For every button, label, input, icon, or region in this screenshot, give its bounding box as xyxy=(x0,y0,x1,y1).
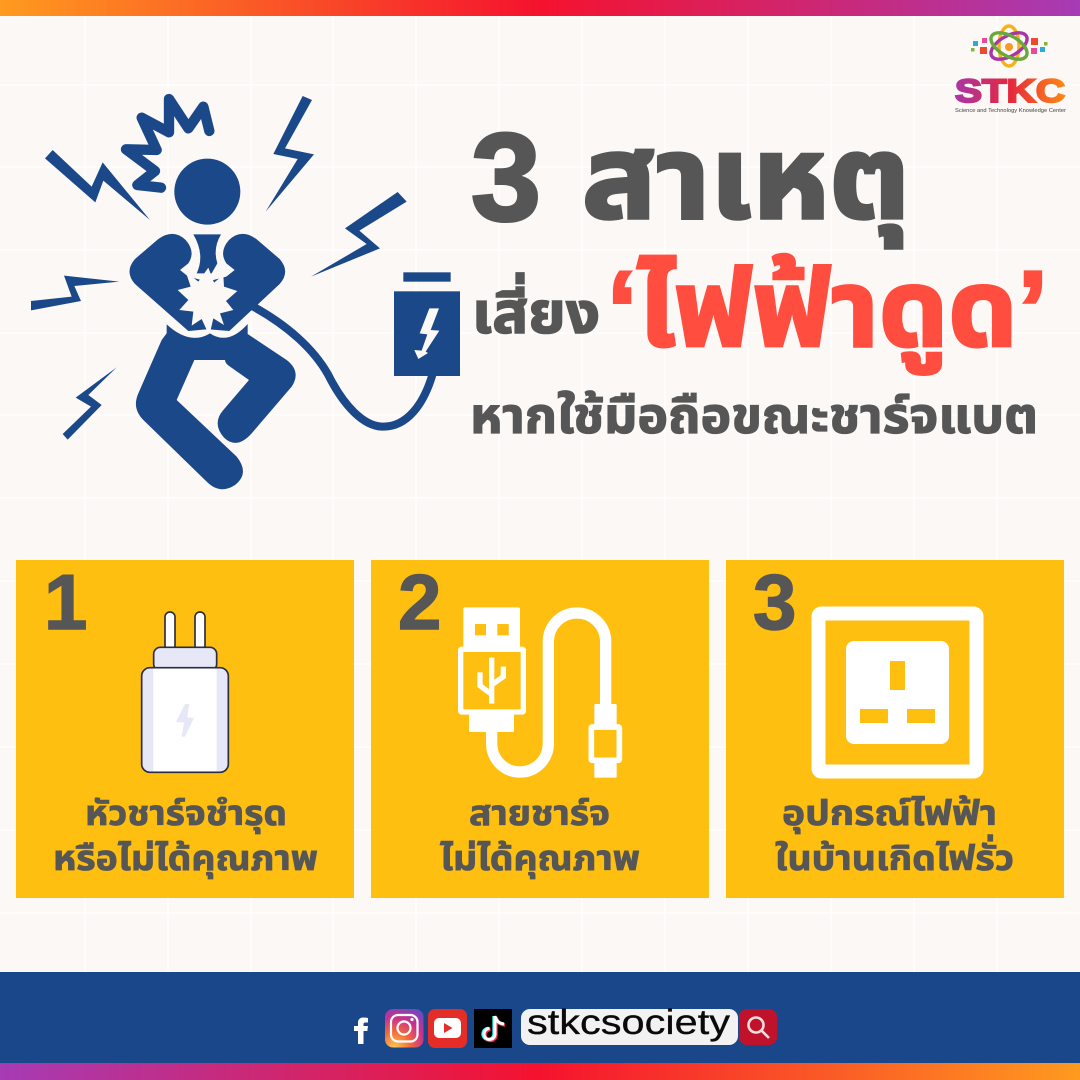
caption 2: ไม่ได้คุณภาพ xyxy=(440,839,640,879)
head xyxy=(174,159,240,225)
arms and torso xyxy=(129,234,285,331)
panel 3: socket xyxy=(726,558,1064,898)
bolt: left xyxy=(31,276,119,310)
icon: instagram xyxy=(385,1009,424,1048)
title: 3 causes xyxy=(471,109,910,248)
bolt: lower left xyxy=(63,367,117,440)
caption 1: หรือไม่ได้คุณภาพ xyxy=(53,839,318,879)
bolt: top left xyxy=(45,150,150,220)
charging cable xyxy=(253,307,432,427)
number 2: 2 xyxy=(398,558,441,646)
top gradient bar xyxy=(0,0,1080,16)
footer band xyxy=(0,972,1080,1063)
caption 3 xyxy=(775,794,1014,878)
battery body xyxy=(394,291,460,376)
search bar xyxy=(521,1003,777,1045)
zigzag above head xyxy=(126,99,209,188)
number 1: 1 xyxy=(44,558,87,646)
handle text: stkcsociety xyxy=(527,1003,731,1042)
icon: facebook xyxy=(354,1018,368,1044)
logo: STKC xyxy=(955,26,1066,114)
bottom gradient bar xyxy=(0,1063,1080,1080)
caption 2: สายชาร์จ xyxy=(469,794,610,833)
title: 3 causes: สาเหตุ xyxy=(582,113,910,248)
icon: youtube xyxy=(428,1009,467,1048)
logo tagline: Science and Technology Knowledge Center xyxy=(955,108,1066,114)
caption 2 xyxy=(440,794,640,879)
heading: risk of: เสี่ยง xyxy=(472,272,600,346)
icon: charger xyxy=(142,612,228,772)
battery lightning xyxy=(414,308,439,359)
hips and bent legs xyxy=(136,324,296,489)
icon: usb cable xyxy=(461,607,619,778)
chest impact burst xyxy=(178,268,237,336)
number 3: 3 xyxy=(753,558,796,646)
bolt: right xyxy=(311,192,407,277)
title: 3 causes: 3 xyxy=(471,109,541,247)
icon: wall socket xyxy=(818,614,976,772)
illustration: person being electrocuted by charging phone xyxy=(31,96,460,489)
caption 1 xyxy=(53,794,318,879)
bolt: top right xyxy=(266,96,314,212)
caption 3: อุปกรณ์ไฟฟ้า xyxy=(782,794,997,834)
logo atom icon xyxy=(971,26,1048,66)
battery cap xyxy=(403,272,451,282)
subheading: หากใช้มือถือขณะชาร์จแบต xyxy=(470,388,1038,444)
heading: electric shock: ‘ไฟฟ้าดูด’ xyxy=(607,248,1048,375)
panel 1: charger xyxy=(16,558,354,898)
icon: tiktok xyxy=(474,1009,512,1048)
icon: magnifier xyxy=(748,1018,769,1038)
logo wordmark: STKC xyxy=(955,73,1065,109)
caption 3: ในบ้านเกิดไฟรั่ว xyxy=(775,834,1014,878)
caption 1: หัวชาร์จชำรุด xyxy=(85,794,287,834)
panel 2: cable xyxy=(371,558,709,898)
